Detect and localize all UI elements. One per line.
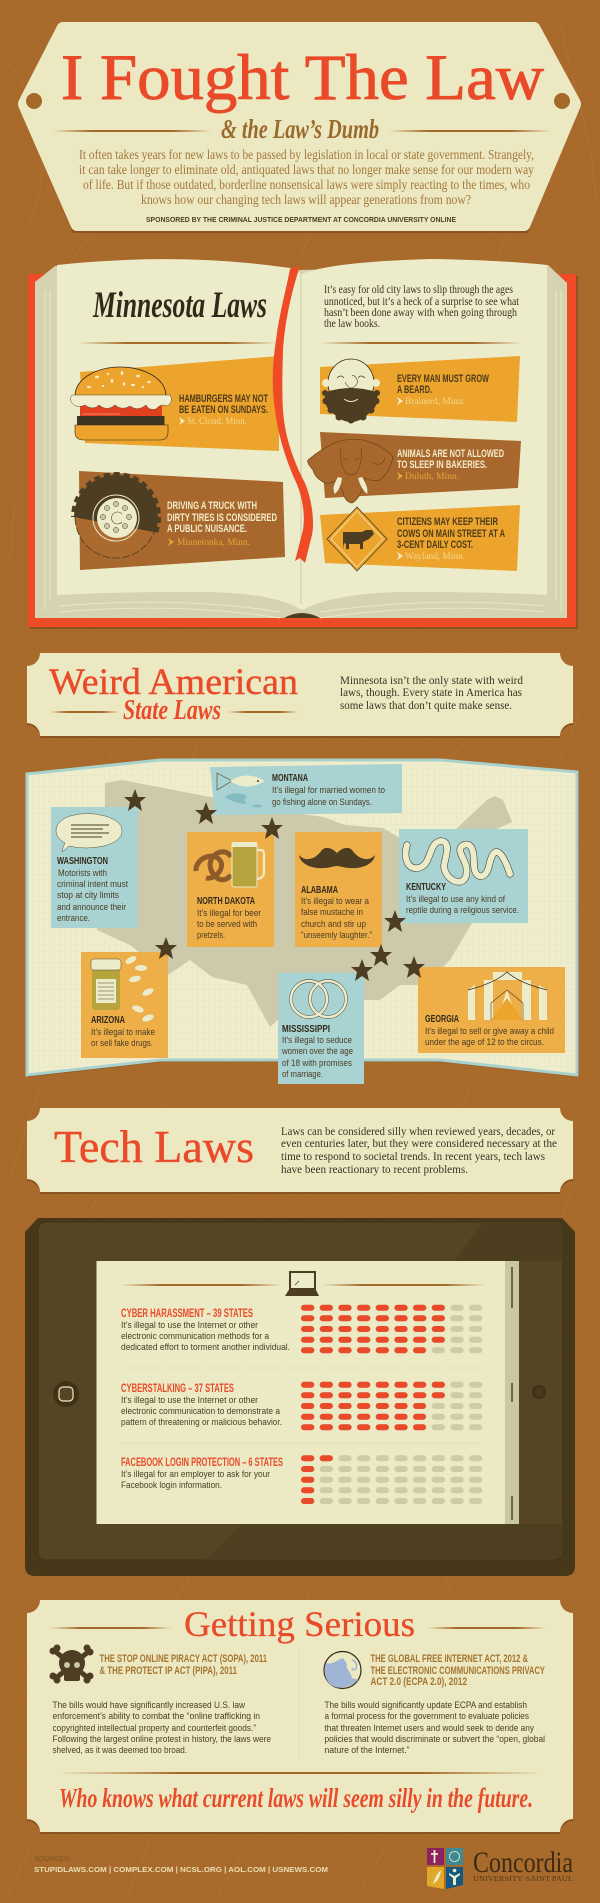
book intro text bbox=[324, 284, 520, 330]
stat: cyberstalking: electronic communication to demonstrate a bbox=[121, 1406, 280, 1416]
Internet Act text: that threaten Internet users and would seek to deride any bbox=[324, 1723, 534, 1733]
Internet Act text bbox=[324, 1700, 545, 1755]
panel: Mississippi: of 18 with promises bbox=[282, 1058, 352, 1068]
stat: Facebook login protection bbox=[121, 1457, 479, 1501]
intro text: it can take longer to eliminate old, antiquated laws that no longer make sense for our modern way bbox=[79, 162, 534, 177]
panel: Mississippi bbox=[278, 973, 364, 1084]
book intro text: the law books. bbox=[324, 318, 380, 330]
panel: Mississippi: It’s illegal to seduce bbox=[282, 1035, 352, 1045]
panel: Arizona: ARIZONA bbox=[91, 1014, 125, 1026]
law text bbox=[397, 516, 505, 562]
panel: Kentucky: reptile during a religious service. bbox=[406, 905, 519, 915]
open book: Minnesota laws bbox=[28, 259, 578, 629]
law text: 3-CENT DAILY COST. bbox=[397, 539, 473, 551]
law text bbox=[397, 373, 489, 407]
panel: Georgia bbox=[418, 967, 565, 1053]
law text bbox=[167, 500, 277, 548]
panel: North Dakota: pretzels. bbox=[197, 930, 225, 940]
law: beards bbox=[320, 356, 520, 424]
law text: A PUBLIC NUISANCE. bbox=[167, 523, 247, 535]
stat: cyber harassment bbox=[121, 1308, 479, 1352]
panel: Alabama: ALABAMA bbox=[301, 884, 338, 896]
intro text bbox=[79, 147, 534, 207]
subheading: State Laws bbox=[123, 694, 221, 726]
panel: Washington: and announce their bbox=[57, 902, 126, 912]
panel: Georgia: under the age of 12 to the circus. bbox=[425, 1037, 544, 1047]
panel: Mississippi: women over the age bbox=[281, 1046, 353, 1056]
law text: Wayland, Minn. bbox=[405, 552, 465, 562]
panel: Alabama: false mustache in bbox=[301, 907, 363, 917]
title plate bbox=[18, 22, 581, 233]
Internet Act text: a formal process for the government to evaluate policies bbox=[324, 1711, 529, 1721]
law text: Minnetonka, Minn. bbox=[177, 538, 250, 548]
SOPA text: copyrighted intellectual property and counterfeit goods.” bbox=[52, 1723, 256, 1733]
icon: laptop bbox=[285, 1272, 319, 1296]
panel: Alabama: It’s illegal to wear a bbox=[301, 896, 369, 906]
SOPA heading: THE STOP ONLINE PIRACY ACT (SOPA), 2011 bbox=[100, 1653, 267, 1665]
panel: Georgia: It’s illegal to sell or give away a child bbox=[425, 1026, 554, 1036]
Internet Act text: The bills would significantly update ECPA and establish bbox=[324, 1700, 527, 1710]
panel: Washington: stop at city limits bbox=[57, 890, 119, 900]
section text bbox=[340, 673, 523, 712]
panel: Montana: It’s illegal for married women to bbox=[272, 785, 385, 795]
Internet Act text: nature of the Internet.” bbox=[324, 1745, 410, 1755]
Internet Act heading: ACT 2.0 (ECPA 2.0), 2012 bbox=[370, 1676, 467, 1688]
panel: Kentucky bbox=[399, 829, 528, 923]
stat: Facebook login protection: FACEBOOK LOGIN PROTECTION – 6 STATES bbox=[121, 1457, 283, 1469]
icon: bearded man bbox=[322, 359, 380, 424]
panel: Washington: criminal intent must bbox=[57, 879, 128, 889]
law text: BE EATEN ON SUNDAYS. bbox=[179, 404, 268, 416]
law text: Brainerd, Minn. bbox=[405, 397, 465, 407]
section text: some laws that don’t quite make sense. bbox=[340, 698, 512, 712]
heading: Getting Serious bbox=[184, 1604, 415, 1644]
panel: Montana: go fishing alone on Sundays. bbox=[272, 797, 372, 807]
law text: A BEARD. bbox=[397, 384, 432, 396]
Internet Act heading: THE GLOBAL FREE INTERNET ACT, 2012 & bbox=[370, 1653, 528, 1665]
pictogram: 37 of 50 bbox=[304, 1385, 479, 1427]
SOPA heading: & THE PROTECT IP ACT (PIPA), 2011 bbox=[100, 1665, 237, 1677]
logo shield bbox=[427, 1848, 463, 1889]
panel: Arizona: It’s illegal to make bbox=[91, 1027, 155, 1037]
SOPA text: Following the largest online protest in history, the laws were bbox=[52, 1734, 271, 1744]
camera bbox=[533, 1386, 545, 1398]
SOPA text: The bills would have significantly increased U.S. law bbox=[52, 1700, 245, 1710]
SOPA text: shelved, as it was deemed too broad. bbox=[52, 1745, 187, 1755]
state stars bbox=[124, 789, 425, 981]
SOPA text: enforcement’s ability to combat the “online trafficking in bbox=[52, 1711, 260, 1721]
section text: Laws can be considered silly when reviewed years, decades, or bbox=[281, 1124, 555, 1138]
section text: even centuries later, but they were considered necessary at the bbox=[281, 1136, 557, 1150]
stat: cyberstalking: CYBERSTALKING – 37 STATES bbox=[121, 1383, 234, 1395]
panel: Kentucky: It’s illegal to use any kind of bbox=[406, 894, 505, 904]
law text: Duluth, Minn. bbox=[405, 472, 459, 482]
book intro text: It’s easy for old city laws to slip through the ages bbox=[324, 284, 513, 296]
panel: Mississippi: of marriage. bbox=[282, 1069, 323, 1079]
intro text: of life. But if those outdated, borderline nonsensical laws were simply reacting to the times, who bbox=[83, 177, 530, 192]
sources bbox=[34, 1854, 328, 1874]
law text: DIRTY TIRES IS CONSIDERED bbox=[167, 512, 277, 524]
book intro text: unnoticed, but it’s a heck of a surprise to see what bbox=[324, 296, 520, 308]
stat: cyber harassment: CYBER HARASSMENT – 39 STATES bbox=[121, 1308, 253, 1320]
section text: have been reactionary to recent problems. bbox=[281, 1162, 468, 1176]
home button bbox=[53, 1381, 79, 1407]
panel: Washington: Motorists with bbox=[58, 868, 107, 878]
law text: HAMBURGERS MAY NOT bbox=[179, 393, 268, 405]
law text bbox=[179, 393, 268, 427]
law text: CITIZENS MAY KEEP THEIR bbox=[397, 516, 498, 528]
law: animals in bakeries bbox=[308, 432, 521, 503]
sources: SOURCES: bbox=[34, 1854, 71, 1863]
Internet Act heading bbox=[370, 1653, 545, 1688]
panel: North Dakota: NORTH DAKOTA bbox=[197, 895, 255, 907]
panel: Washington: WASHINGTON bbox=[57, 855, 108, 867]
icon: speech bubble bbox=[56, 814, 122, 852]
heading: Weird American bbox=[49, 662, 298, 703]
pictogram: 6 of 50 bbox=[304, 1458, 479, 1501]
panel: North Dakota: to be served with bbox=[197, 919, 257, 929]
section text: laws, though. Every state in America has bbox=[340, 685, 522, 699]
stat: cyber harassment: dedicated effort to torment another individual. bbox=[121, 1342, 290, 1352]
icon: fish bbox=[217, 773, 265, 808]
law text: ANIMALS ARE NOT ALLOWED bbox=[397, 448, 504, 460]
panel: Washington: entrance. bbox=[57, 913, 90, 923]
tablet screen bbox=[96, 1261, 519, 1524]
icon: wedding rings bbox=[291, 981, 346, 1017]
stat: cyber harassment: electronic communication methods for a bbox=[121, 1331, 269, 1341]
icon: mustache bbox=[299, 848, 375, 868]
sponsor line: SPONSORED BY THE CRIMINAL JUSTICE DEPARTMENT AT CONCORDIA UNIVERSITY ONLINE bbox=[146, 217, 456, 224]
icon: hamburger bbox=[70, 367, 171, 440]
SOPA text bbox=[52, 1700, 271, 1755]
law: cows bbox=[320, 505, 520, 571]
panel: Arizona bbox=[81, 952, 168, 1058]
panel: Washington bbox=[51, 807, 138, 928]
law text: TO SLEEP IN BAKERIES. bbox=[397, 459, 487, 471]
icon: skull and crossbones bbox=[50, 1644, 94, 1684]
Internet Act text: policies that would discriminate or subvert the “open, global bbox=[324, 1734, 545, 1744]
law text: EVERY MAN MUST GROW bbox=[397, 373, 489, 385]
law: hamburgers bbox=[70, 356, 279, 451]
law text: DRIVING A TRUCK WITH bbox=[167, 500, 257, 512]
stat: Facebook login protection: It’s illegal for an employer to ask for your bbox=[121, 1469, 270, 1479]
icon: elephant bbox=[308, 439, 393, 503]
Concordia logo bbox=[427, 1846, 573, 1889]
section text bbox=[281, 1124, 557, 1176]
icon: circus tent bbox=[468, 972, 547, 1020]
plate holes bbox=[26, 93, 570, 109]
icon: snake bbox=[406, 841, 510, 882]
icon: dirty tire bbox=[73, 474, 159, 560]
section plate: Weird American State Laws bbox=[27, 653, 573, 738]
law text: COWS ON MAIN STREET AT A bbox=[397, 528, 505, 540]
icon: cow crossing sign bbox=[327, 507, 387, 571]
US silhouette bbox=[95, 780, 512, 1027]
panel: Montana bbox=[210, 764, 402, 815]
icon: pretzel and beer bbox=[196, 842, 264, 887]
law text bbox=[397, 448, 504, 482]
panel: North Dakota: It’s illegal for beer bbox=[197, 908, 261, 918]
panel: Mississippi: MISSISSIPPI bbox=[282, 1023, 330, 1035]
section plate: Tech Laws bbox=[27, 1108, 573, 1194]
folded US map bbox=[27, 760, 579, 1084]
intro text: knows how our changing tech laws will appear generations from now? bbox=[141, 192, 471, 207]
panel: Getting Serious bbox=[27, 1600, 573, 1834]
Concordia logo: UNIVERSITY·SAINT PAUL bbox=[473, 1875, 573, 1883]
panel: Kentucky: KENTUCKY bbox=[406, 881, 446, 893]
stat: Facebook login protection: Facebook login information. bbox=[121, 1480, 222, 1490]
tablet bbox=[25, 1218, 575, 1576]
law text: St. Cloud, Minn. bbox=[187, 417, 247, 427]
panel: North Dakota bbox=[187, 832, 274, 947]
stat: cyberstalking bbox=[121, 1383, 479, 1427]
section text: time to respond to societal trends. In recent years, tech laws bbox=[281, 1149, 545, 1163]
subtitle: & the Law’s Dumb bbox=[221, 114, 379, 144]
pictogram: 39 of 50 bbox=[304, 1308, 479, 1350]
title: I Fought The Law bbox=[61, 42, 544, 114]
heading: Tech Laws bbox=[54, 1121, 254, 1172]
book intro text: hasn’t been done away with when going through bbox=[324, 307, 517, 319]
panel: Alabama: “unseemly laughter.” bbox=[301, 930, 372, 940]
panel: Alabama: church and stir up bbox=[301, 919, 366, 929]
bookmark ribbon bbox=[273, 266, 313, 563]
stat: cyberstalking: pattern of threatening or malicious behavior. bbox=[121, 1417, 282, 1427]
heading: Minnesota Laws: Minnesota Laws bbox=[92, 285, 267, 326]
panel: Georgia: GEORGIA bbox=[425, 1013, 459, 1025]
icon: pill bottle bbox=[91, 954, 155, 1023]
stat: cyber harassment: It’s illegal to use the Internet or other bbox=[121, 1320, 258, 1330]
SOPA heading bbox=[100, 1653, 267, 1677]
panel: Arizona: or sell fake drugs. bbox=[91, 1038, 153, 1048]
icon: globe bbox=[324, 1652, 361, 1688]
panel: Montana: MONTANA bbox=[272, 772, 308, 784]
intro text: It often takes years for new laws to be passed by legislation in local or state government. Strangely, bbox=[79, 147, 534, 162]
stat: cyberstalking: It’s illegal to use the Internet or other bbox=[121, 1395, 258, 1405]
panel: Alabama bbox=[295, 832, 382, 947]
law: truck tires bbox=[73, 471, 285, 570]
section text: Minnesota isn’t the only state with weird bbox=[340, 673, 523, 687]
logo wordmark: Concordia bbox=[473, 1846, 573, 1879]
sources: STUPIDLAWS.COM | COMPLEX.COM | NCSL.ORG | AOL.COM | USNEWS.COM bbox=[34, 1865, 328, 1874]
